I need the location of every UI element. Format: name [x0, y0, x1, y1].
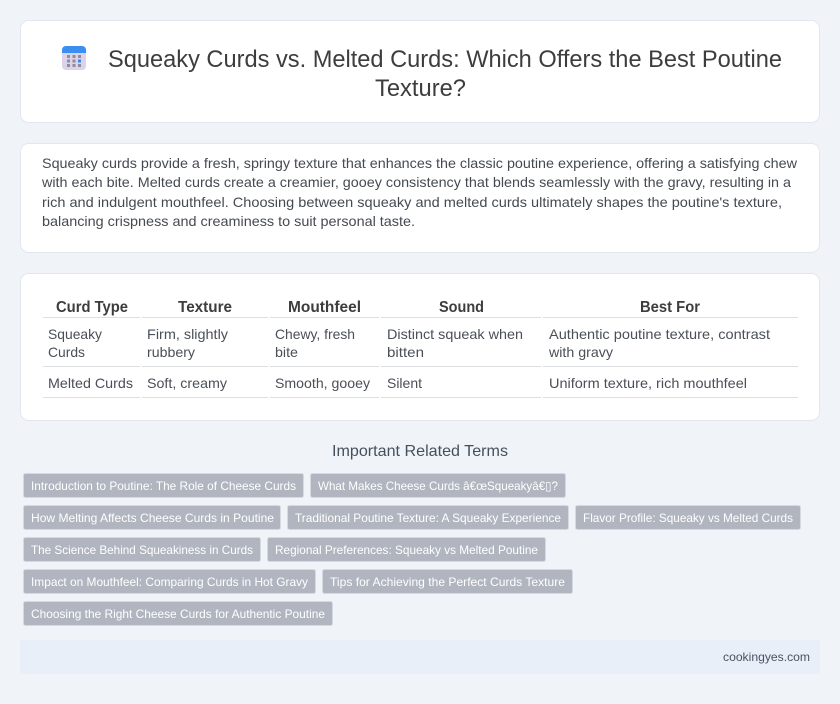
table row: melted curds: Melted Curds [48, 375, 133, 391]
tag: Impact on Mouthfeel: Comparing Curds in Hot Gravy [31, 575, 308, 589]
tag: Regional Preferences: Squeaky vs Melted Poutine [275, 543, 538, 557]
table header: Texture [178, 299, 232, 316]
tag: How Melting Affects Cheese Curds in Poutine [31, 511, 274, 525]
tag: Tips for Achieving the Perfect Curds Texture [330, 575, 565, 589]
table row: squeaky curds: Curds [48, 344, 85, 360]
table row: squeaky curds: rubbery [147, 344, 195, 360]
tag [322, 570, 572, 594]
icon: calendar [62, 46, 86, 70]
table row: melted curds: Smooth, gooey [275, 375, 370, 391]
footer [20, 640, 820, 674]
tag [268, 538, 546, 562]
table row: melted curds [48, 375, 747, 391]
footer: cookingyes.com [723, 650, 810, 664]
tag: Traditional Poutine Texture: A Squeaky Experience [295, 511, 561, 525]
title [108, 46, 782, 102]
title: Texture? [375, 75, 466, 102]
tag [576, 506, 800, 530]
table header: Curd Type [56, 299, 128, 316]
panel: header [20, 20, 820, 122]
tag [288, 506, 568, 530]
table row: squeaky curds: Authentic poutine texture, contrast [549, 326, 770, 342]
tag: Choosing the Right Cheese Curds for Authentic Poutine [31, 607, 325, 621]
tag [24, 506, 280, 530]
table row: squeaky curds: with gravy [548, 344, 613, 360]
table row: squeaky curds: Squeaky [48, 326, 102, 342]
table header: Sound [439, 299, 484, 316]
title: Squeaky Curds vs. Melted Curds: Which Offers the Best Poutine [108, 46, 782, 73]
table row: squeaky curds: Firm, slightly [147, 326, 228, 342]
tag [24, 570, 316, 594]
tag: Introduction to Poutine: The Role of Cheese Curds [31, 479, 296, 493]
heading: related terms: Important Related Terms [332, 443, 508, 460]
text block: introduction: with each bite. Melted curds create a creamier, gooey consistency that blends seamlessly with the gravy, resulting in a [41, 174, 791, 190]
tag: The Science Behind Squeakiness in Curds [31, 543, 253, 557]
panel: introduction [20, 144, 820, 252]
text block: introduction: rich and indulgent mouthfeel. Choosing between squeaky and melted curds ultimately shapes the poutine's texture, [42, 194, 782, 210]
table row: melted curds: Soft, creamy [147, 375, 227, 391]
table header: Mouthfeel [288, 299, 361, 316]
table header [56, 299, 700, 316]
tags: related terms [24, 474, 800, 626]
tag [24, 538, 260, 562]
table row: squeaky curds: Distinct squeak when [387, 326, 523, 342]
table row: melted curds: Uniform texture, rich mouthfeel [549, 375, 747, 391]
panel: comparison table [20, 274, 820, 420]
text block: introduction: Squeaky curds provide a fresh, springy texture that enhances the classic poutine experience, offering a satisfying chew [42, 155, 798, 171]
tag [310, 474, 566, 498]
tag [24, 602, 332, 626]
table header: Best For [640, 299, 700, 316]
table row: squeaky curds: bite [275, 344, 298, 360]
tag [24, 474, 304, 498]
table row: squeaky curds: Chewy, fresh [275, 326, 355, 342]
table row: squeaky curds [48, 326, 770, 360]
table row: squeaky curds: bitten [387, 344, 424, 360]
table row: melted curds: Silent [387, 375, 422, 391]
text block: introduction: balancing crispness and creaminess to suit personal taste. [42, 213, 415, 229]
tag: Flavor Profile: Squeaky vs Melted Curds [583, 511, 793, 525]
tag: What Makes Cheese Curds â€œSqueakyâ€▯? [318, 479, 558, 493]
text block: introduction [41, 155, 798, 229]
